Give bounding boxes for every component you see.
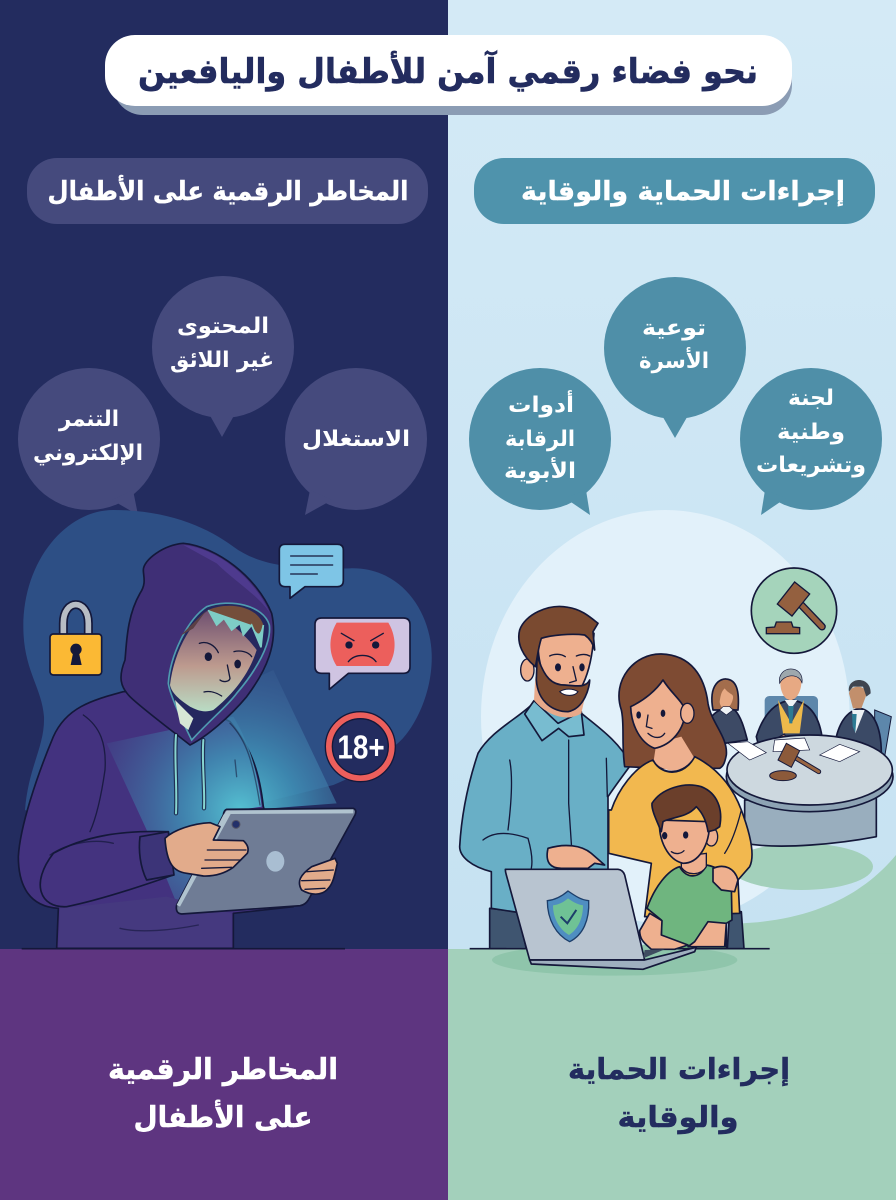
ground ellipse under laptop [492,944,737,976]
heading: protection measures [474,158,875,224]
right hand [299,858,337,894]
bubble: parental control tools: أدوات [508,389,574,418]
bottom text: risks: المخاطر الرقمية [108,1052,338,1086]
icon: padlock [50,605,102,675]
man [460,607,631,949]
sleeve and arm [40,831,174,907]
background: dark left panel [0,0,448,950]
title banner: نحو فضاء رقمي آمن للأطفال واليافعين [138,50,758,92]
bubble: exploitation: الاستغلال [302,427,410,452]
committee table [710,669,893,846]
bubble: cyberbullying [18,368,160,515]
bubble: family awareness: الأسرة [639,346,709,374]
bubble: inappropriate content: المحتوى [177,314,269,339]
illustration: teen with tablet [18,510,432,949]
table gavel [770,743,819,781]
bubble: parental control tools: الرقابة [505,427,575,452]
bottom text: risks [108,1052,338,1134]
bubble: inappropriate content: غير اللائق [170,348,274,373]
pointing hand [547,846,605,868]
heading: digital risks: المخاطر الرقمية على الأطفال [48,175,408,207]
bubble: family awareness [604,277,746,438]
illustration: family at laptop and committee [460,510,896,976]
icon: gavel badge [751,568,837,653]
background blob [23,510,432,843]
tablet [176,808,356,914]
icon: 18+ badge: 18+ [337,729,385,766]
bubble: parental control tools [469,368,611,515]
bottom text: risks: على الأطفال [134,1099,312,1134]
bubble: national committee and legislation [740,368,882,515]
bubble: exploitation [285,368,427,515]
bubble: family awareness: توعية [642,316,706,341]
boy [640,785,738,949]
bubble: national committee and legislation: لجنة [788,386,834,411]
committee member: woman [710,679,747,743]
light beam [107,670,337,903]
woman's hand on shoulder [713,866,738,892]
bubble: national committee and legislation: وتشريعات [756,453,866,478]
committee member: man [836,680,891,757]
bottom text: protection: إجراءات الحماية [568,1052,790,1087]
bubble: inappropriate content [152,276,294,437]
bubble: cyberbullying: التنمر [58,407,119,432]
bubble: cyberbullying: الإلكتروني [33,441,143,466]
bubble: parental control tools: الأبوية [504,456,576,484]
bottom band: protection [448,949,896,1200]
hoodie body [18,690,293,948]
icon: angry message [315,618,410,689]
green swoosh [741,855,896,953]
drawstrings [175,735,204,813]
laptop with shield [505,869,696,969]
bubble: national committee and legislation: وطنية [777,420,845,445]
collar [175,700,193,730]
ground ellipse under table [730,843,873,890]
heading: protection measures: إجراءات الحماية والوقاية [521,177,845,207]
bottom band: risks [0,949,448,1200]
background: light right panel [448,0,896,950]
title banner [105,35,792,115]
hood [121,543,274,745]
committee member: chair [756,669,822,743]
ground line [470,946,770,951]
ground line [22,946,345,951]
woman [609,654,752,949]
bottom text: protection: والوقاية [618,1100,738,1134]
bottom text: protection [568,1052,790,1134]
background circle [481,510,850,923]
icon: 18+ badge [325,712,395,782]
left hand [165,823,248,876]
heading: digital risks [27,158,428,224]
icon: chat bubble [279,544,343,598]
face [170,610,257,711]
